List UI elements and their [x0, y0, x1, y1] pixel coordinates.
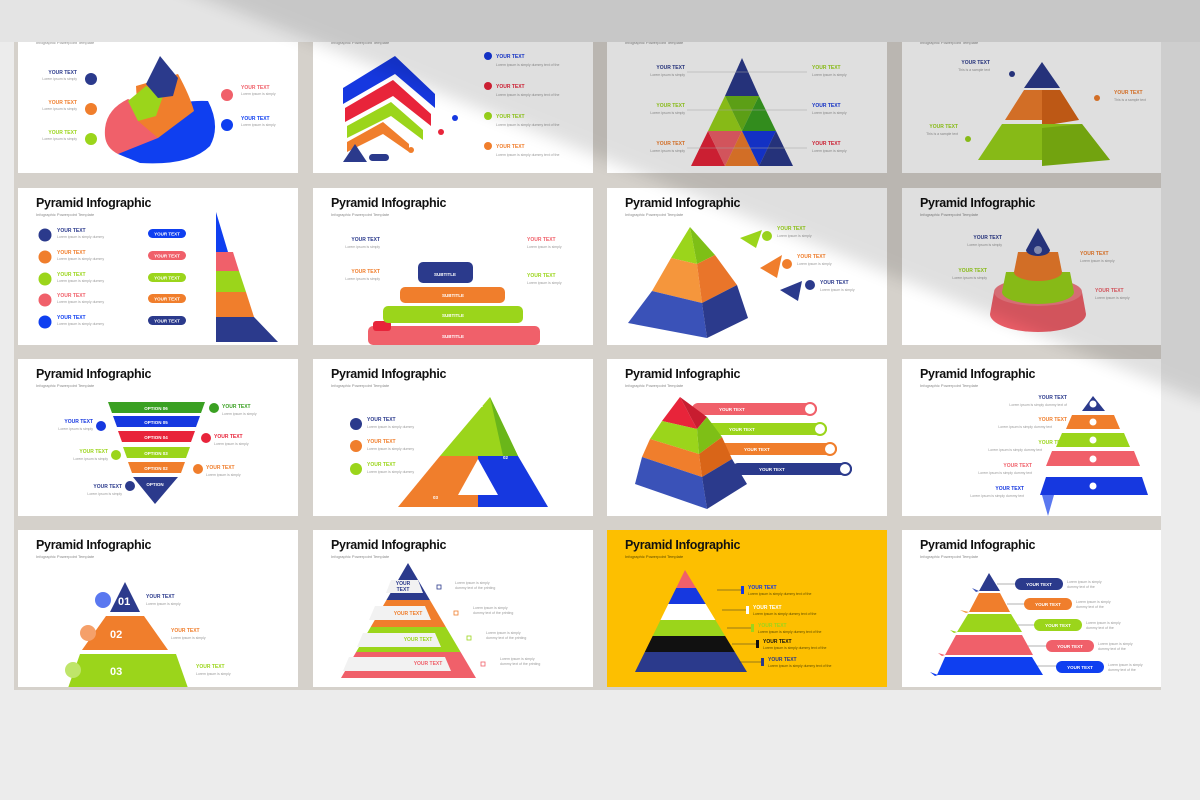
slide 9: inverted pyramid options: Lorem ipsum is simply — [214, 442, 249, 446]
slide 12: banded pyramid: YOUR TEXT — [1038, 395, 1067, 401]
slide 15: yellow background pyramid: YOUR TEXT — [763, 639, 792, 645]
slide 12: banded pyramid: Lorem ipsum is simply dummy text — [988, 448, 1042, 452]
slide 11: 3D pyramid with bars: YOUR TEXT — [729, 427, 755, 432]
slide 7: 3D pyramid with flags: Lorem ipsum is simply — [777, 234, 812, 238]
slide 13: numbered pyramid — [18, 530, 298, 687]
slide 16: pyramid with pill labels — [902, 530, 1182, 687]
slide 10: triangle with hole: Lorem ipsum is simply dummy — [367, 447, 414, 451]
slide 6: stacked layers: Lorem ipsum is simply — [345, 277, 380, 281]
slide 1: cone pyramid: YOUR TEXT — [241, 116, 270, 122]
slide 9: inverted pyramid options: YOUR TEXT — [206, 465, 235, 471]
slide 10: triangle with hole: YOUR TEXT — [367, 417, 396, 423]
slide 8: layered cone: Infographic Powerpoint Template — [920, 212, 979, 217]
slide 9: inverted pyramid options — [18, 359, 298, 516]
slide 6: stacked layers: Lorem ipsum is simply — [527, 245, 562, 249]
slide 14: pyramid with planks: YOUR TEXT — [394, 611, 422, 617]
slide 15: yellow background pyramid: YOUR TEXT — [748, 585, 777, 591]
slide 1: cone pyramid: Lorem ipsum is simply — [42, 77, 77, 81]
slide 9: inverted pyramid options: OPTION — [146, 482, 164, 487]
slide 2: 3D chevrons: Lorem ipsum is simply dummy text of the — [496, 93, 559, 97]
slide 1: cone pyramid: Lorem ipsum is simply — [42, 137, 77, 141]
slide 12: banded pyramid: Lorem ipsum is simply dummy text — [998, 425, 1052, 429]
slide 11: 3D pyramid with bars: Infographic Powerpoint Template — [625, 383, 684, 388]
slide 6: stacked layers: Infographic Powerpoint Template — [331, 212, 390, 217]
slide 16: pyramid with pill labels: Lorem ipsum is simply — [1067, 580, 1102, 584]
slide 5: side triangle with pills: YOUR TEXT — [57, 250, 86, 256]
slide 3: segmented triangle: Lorem ipsum is simply — [812, 149, 847, 153]
slide 9: inverted pyramid options: OPTION 02 — [144, 466, 168, 471]
slide 2: 3D chevrons: Lorem ipsum is simply dummy text of the — [496, 123, 559, 127]
slide 10: triangle with hole: 03 — [433, 495, 439, 500]
slide 14: pyramid with planks: YOUR — [396, 581, 411, 587]
slide 9: inverted pyramid options: Lorem ipsum is simply — [73, 457, 108, 461]
slide 1: cone pyramid: Lorem ipsum is simply — [42, 107, 77, 111]
slide 5: side triangle with pills: YOUR TEXT — [154, 276, 180, 280]
slide 16: pyramid with pill labels: Lorem ipsum is simply — [1086, 621, 1121, 625]
slide 7: 3D pyramid with flags — [607, 188, 887, 345]
slide 8: layered cone: Lorem ipsum is simply — [1080, 259, 1115, 263]
slide 15: yellow background pyramid: Lorem ipsum is simply dummy text of the — [753, 612, 816, 616]
slide 12: banded pyramid — [902, 359, 1182, 516]
slide 16: pyramid with pill labels: YOUR TEXT — [1026, 582, 1052, 587]
slide 12: banded pyramid: YOUR TEXT — [1038, 417, 1067, 423]
slide 7: 3D pyramid with flags: Pyramid Infographic — [625, 196, 741, 210]
slide 14: pyramid with planks: YOUR TEXT — [404, 637, 432, 643]
slide 13: numbered pyramid: YOUR TEXT — [146, 594, 175, 600]
slide 14: pyramid with planks: Pyramid Infographic — [331, 538, 447, 552]
slide 11: 3D pyramid with bars: YOUR TEXT — [719, 407, 745, 412]
slide 16: pyramid with pill labels: dummy text of the — [1076, 605, 1104, 609]
slide 8: layered cone: YOUR TEXT — [1095, 288, 1124, 294]
slide 11: 3D pyramid with bars: YOUR TEXT — [744, 447, 770, 452]
slide 8: layered cone: YOUR TEXT — [1080, 251, 1109, 257]
slide 15: yellow background pyramid: YOUR TEXT — [753, 605, 782, 611]
slide 14: pyramid with planks: Lorem ipsum is simply — [473, 606, 508, 610]
slide 8: layered cone — [902, 188, 1182, 345]
slide 6: stacked layers: SUBTITLE — [442, 313, 464, 318]
slide 6: stacked layers: YOUR TEXT — [351, 269, 380, 275]
slide 11: 3D pyramid with bars: YOUR TEXT — [759, 467, 785, 472]
slide 5: side triangle with pills: Lorem ipsum is simply dummy — [57, 257, 104, 261]
slide grid container — [14, 42, 1161, 690]
slide 5: side triangle with pills: YOUR TEXT — [57, 293, 86, 299]
slide 2: 3D chevrons: YOUR TEXT — [496, 114, 525, 120]
slide 15: yellow background pyramid: Lorem ipsum is simply dummy text of the — [768, 664, 831, 668]
slide 3: segmented triangle — [607, 16, 887, 173]
slide 2: 3D chevrons: Lorem ipsum is simply dummy text of the — [496, 63, 559, 67]
slide 3: segmented triangle: Lorem ipsum is simply — [812, 73, 847, 77]
slide 3: segmented triangle: YOUR TEXT — [812, 65, 841, 71]
slide 11: 3D pyramid with bars — [607, 359, 887, 516]
slide 9: inverted pyramid options: OPTION 05 — [144, 420, 168, 425]
slide 7: 3D pyramid with flags: YOUR TEXT — [820, 280, 849, 286]
slide 13: numbered pyramid: YOUR TEXT — [171, 628, 200, 634]
slide 12: banded pyramid: YOUR TEXT — [1038, 440, 1067, 446]
slide 14: pyramid with planks: YOUR TEXT — [414, 661, 442, 667]
slide 14: pyramid with planks: dummy text of the printing — [486, 636, 526, 640]
slide 1: cone pyramid: YOUR TEXT — [241, 85, 270, 91]
slide 9: inverted pyramid options: Infographic Powerpoint Template — [36, 383, 95, 388]
slide 4: 3-tier pyramid — [902, 16, 1182, 173]
slide 2: 3D chevrons: YOUR TEXT — [496, 54, 525, 60]
slide 6: stacked layers: YOUR TEXT — [527, 237, 556, 243]
slide 3: segmented triangle: Lorem ipsum is simply — [812, 111, 847, 115]
slide 16: pyramid with pill labels: dummy text of the — [1067, 585, 1095, 589]
slide 15: yellow background pyramid: YOUR TEXT — [768, 657, 797, 663]
slide 1: cone pyramid: YOUR TEXT — [48, 130, 77, 136]
slide 10: triangle with hole: YOUR TEXT — [367, 462, 396, 468]
slide 9: inverted pyramid options: YOUR TEXT — [64, 419, 93, 425]
slide 16: pyramid with pill labels: YOUR TEXT — [1057, 644, 1083, 649]
slide 8: layered cone: YOUR TEXT — [958, 268, 987, 274]
slide 13: numbered pyramid: Lorem ipsum is simply — [196, 672, 231, 676]
slide 16: pyramid with pill labels: Lorem ipsum is simply — [1108, 663, 1143, 667]
slide 10: triangle with hole: Lorem ipsum is simply dummy — [367, 470, 414, 474]
slide 8: layered cone: Lorem ipsum is simply — [952, 276, 987, 280]
slide 15: yellow background pyramid: YOUR TEXT — [758, 623, 787, 629]
slide 5: side triangle with pills: Lorem ipsum is simply dummy — [57, 322, 104, 326]
slide 6: stacked layers: SUBTITLE — [442, 293, 464, 298]
slide 9: inverted pyramid options: OPTION 03 — [144, 451, 168, 456]
slide 6: stacked layers: SUBTITLE — [434, 272, 456, 277]
slide 4: 3-tier pyramid: YOUR TEXT — [1114, 90, 1143, 96]
slide 16: pyramid with pill labels: Lorem ipsum is simply — [1098, 642, 1133, 646]
slide 5: side triangle with pills: Lorem ipsum is simply dummy — [57, 279, 104, 283]
slide 13: numbered pyramid: Infographic Powerpoint Template — [36, 554, 95, 559]
slide 6: stacked layers: Lorem ipsum is simply — [527, 281, 562, 285]
slide 6: stacked layers: YOUR TEXT — [527, 273, 556, 279]
slide 12: banded pyramid: Pyramid Infographic — [920, 367, 1036, 381]
slide 9: inverted pyramid options: OPTION 06 — [144, 406, 168, 411]
slide 5: side triangle with pills: YOUR TEXT — [57, 272, 86, 278]
slide 3: segmented triangle: Lorem ipsum is simply — [650, 149, 685, 153]
slide 4: 3-tier pyramid: This is a sample text — [1114, 98, 1146, 102]
slide 9: inverted pyramid options: Lorem ipsum is simply — [58, 427, 93, 431]
slide 9: inverted pyramid options: OPTION 04 — [144, 435, 168, 440]
slide 2: 3D chevrons — [313, 16, 593, 173]
slide 8: layered cone: Pyramid Infographic — [920, 196, 1036, 210]
slide 6: stacked layers: Pyramid Infographic — [331, 196, 447, 210]
slide 11: 3D pyramid with bars: Pyramid Infographic — [625, 367, 741, 381]
slide 4: 3-tier pyramid: YOUR TEXT — [961, 60, 990, 66]
slide 14: pyramid with planks: Lorem ipsum is simply — [486, 631, 521, 635]
slide 15: yellow background pyramid: Infographic Powerpoint Template — [625, 554, 684, 559]
slide 8: layered cone: Lorem ipsum is simply — [967, 243, 1002, 247]
slide 6: stacked layers: Lorem ipsum is simply — [345, 245, 380, 249]
slide 10: triangle with hole: Lorem ipsum is simply dummy — [367, 425, 414, 429]
slide 14: pyramid with planks: dummy text of the printing — [500, 662, 540, 666]
slide 5: side triangle with pills: YOUR TEXT — [57, 315, 86, 321]
slide 16: pyramid with pill labels: YOUR TEXT — [1035, 602, 1061, 607]
slide 14: pyramid with planks — [313, 530, 593, 687]
slide 15: yellow background pyramid — [607, 530, 887, 687]
slide 2: 3D chevrons: Lorem ipsum is simply dummy text of the — [496, 153, 559, 157]
slide 3: segmented triangle: Lorem ipsum is simply — [650, 111, 685, 115]
slide 10: triangle with hole: Pyramid Infographic — [331, 367, 447, 381]
slide 5: side triangle with pills — [18, 188, 298, 345]
slide 3: segmented triangle: YOUR TEXT — [812, 141, 841, 147]
slide 14: pyramid with planks: Infographic Powerpoint Template — [331, 554, 390, 559]
slide 1: cone pyramid: Lorem ipsum is simply — [241, 123, 276, 127]
slide 13: numbered pyramid: 03 — [110, 666, 122, 678]
slide 7: 3D pyramid with flags: YOUR TEXT — [797, 254, 826, 260]
slide 12: banded pyramid: YOUR TEXT — [995, 486, 1024, 492]
slide 15: yellow background pyramid: Lorem ipsum is simply dummy text of the — [763, 646, 826, 650]
slide 7: 3D pyramid with flags: Lorem ipsum is simply — [820, 288, 855, 292]
slide 15: yellow background pyramid: Pyramid Infographic — [625, 538, 741, 552]
slide 14: pyramid with planks: dummy text of the printing — [473, 611, 513, 615]
slide 9: inverted pyramid options: YOUR TEXT — [222, 404, 251, 410]
slide 1: cone pyramid — [18, 16, 298, 173]
slide 16: pyramid with pill labels: dummy text of the — [1108, 668, 1136, 672]
slide 7: 3D pyramid with flags: Infographic Powerpoint Template — [625, 212, 684, 217]
slide 2: 3D chevrons: YOUR TEXT — [496, 144, 525, 150]
slide 3: segmented triangle: YOUR TEXT — [656, 65, 685, 71]
slide 13: numbered pyramid: Lorem ipsum is simply — [171, 636, 206, 640]
slide 9: inverted pyramid options: YOUR TEXT — [214, 434, 243, 440]
slide 5: side triangle with pills: YOUR TEXT — [57, 228, 86, 234]
slide 5: side triangle with pills: YOUR TEXT — [154, 318, 180, 324]
slide 9: inverted pyramid options: Lorem ipsum is simply — [206, 473, 241, 477]
slide 5: side triangle with pills: YOUR TEXT — [154, 254, 180, 258]
slide 12: banded pyramid: Lorem ipsum is simply dummy text of — [1009, 403, 1067, 407]
slide 7: 3D pyramid with flags: YOUR TEXT — [777, 226, 806, 232]
slide 10: triangle with hole: Infographic Powerpoint Template — [331, 383, 390, 388]
slide 5: side triangle with pills: Pyramid Infographic — [36, 196, 152, 210]
slide 16: pyramid with pill labels: YOUR TEXT — [1045, 623, 1071, 628]
slide 3: segmented triangle: YOUR TEXT — [656, 141, 685, 147]
slide 10: triangle with hole: 02 — [503, 455, 509, 460]
slide 16: pyramid with pill labels: Lorem ipsum is simply — [1076, 600, 1111, 604]
slide 3: segmented triangle: Lorem ipsum is simply — [650, 73, 685, 77]
slide 9: inverted pyramid options: Lorem ipsum is simply — [222, 412, 257, 416]
slide 9: inverted pyramid options: Lorem ipsum is simply — [87, 492, 122, 496]
slide 15: yellow background pyramid: Lorem ipsum is simply dummy text of the — [748, 592, 811, 596]
slide 13: numbered pyramid: YOUR TEXT — [196, 664, 225, 670]
slide 10: triangle with hole: 01 — [478, 403, 484, 408]
slide 1: cone pyramid: YOUR TEXT — [48, 70, 77, 76]
slide 7: 3D pyramid with flags: Lorem ipsum is simply — [797, 262, 832, 266]
slide 13: numbered pyramid: 01 — [118, 596, 130, 608]
slide 9: inverted pyramid options: YOUR TEXT — [93, 484, 122, 490]
slide 1: cone pyramid: Lorem ipsum is simply — [241, 92, 276, 96]
slide 6: stacked layers: SUBTITLE — [442, 334, 464, 339]
slide 12: banded pyramid: Lorem ipsum is simply dummy text — [978, 471, 1032, 475]
slide 10: triangle with hole — [313, 359, 593, 516]
slide 12: banded pyramid: Lorem ipsum is simply dummy text — [970, 494, 1024, 498]
slide 13: numbered pyramid: 02 — [110, 629, 122, 641]
slide 5: side triangle with pills: YOUR TEXT — [154, 296, 180, 302]
slide 14: pyramid with planks: dummy text of the printing — [455, 586, 495, 590]
slide 9: inverted pyramid options: YOUR TEXT — [79, 449, 108, 455]
slide 16: pyramid with pill labels: Pyramid Infographic — [920, 538, 1036, 552]
slide 5: side triangle with pills: Lorem ipsum is simply dummy — [57, 235, 104, 239]
slide 12: banded pyramid: Infographic Powerpoint Template — [920, 383, 979, 388]
slide 5: side triangle with pills: Infographic Powerpoint Template — [36, 212, 95, 217]
slide 13: numbered pyramid: Pyramid Infographic — [36, 538, 152, 552]
slide 1: cone pyramid: YOUR TEXT — [48, 100, 77, 106]
slide 14: pyramid with planks: TEXT — [397, 587, 409, 593]
slide 2: 3D chevrons: YOUR TEXT — [496, 84, 525, 90]
slide 4: 3-tier pyramid: This is a sample text — [958, 68, 990, 72]
slide 14: pyramid with planks: Lorem ipsum is simply — [500, 657, 535, 661]
slide 5: side triangle with pills: YOUR TEXT — [154, 232, 180, 236]
slide 3: segmented triangle: YOUR TEXT — [656, 103, 685, 109]
slide 8: layered cone: YOUR TEXT — [973, 235, 1002, 241]
slide 15: yellow background pyramid: Lorem ipsum is simply dummy text of the — [758, 630, 821, 634]
slide 14: pyramid with planks: Lorem ipsum is simply — [455, 581, 490, 585]
slide 16: pyramid with pill labels: dummy text of the — [1098, 647, 1126, 651]
slide 4: 3-tier pyramid: YOUR TEXT — [929, 124, 958, 130]
slide 16: pyramid with pill labels: YOUR TEXT — [1067, 665, 1093, 670]
slide 4: 3-tier pyramid: This is a sample text — [926, 132, 958, 136]
slide 6: stacked layers — [313, 188, 593, 345]
slide 3: segmented triangle: YOUR TEXT — [812, 103, 841, 109]
slide 8: layered cone: Lorem ipsum is simply — [1095, 296, 1130, 300]
slide 13: numbered pyramid: Lorem ipsum is simply — [146, 602, 181, 606]
slide 9: inverted pyramid options: Pyramid Infographic — [36, 367, 152, 381]
slide 16: pyramid with pill labels: dummy text of the — [1086, 626, 1114, 630]
slide 16: pyramid with pill labels: Infographic Powerpoint Template — [920, 554, 979, 559]
slide 6: stacked layers: YOUR TEXT — [351, 237, 380, 243]
slide 10: triangle with hole: YOUR TEXT — [367, 439, 396, 445]
slide 12: banded pyramid: YOUR TEXT — [1003, 463, 1032, 469]
slide 5: side triangle with pills: Lorem ipsum is simply dummy — [57, 300, 104, 304]
